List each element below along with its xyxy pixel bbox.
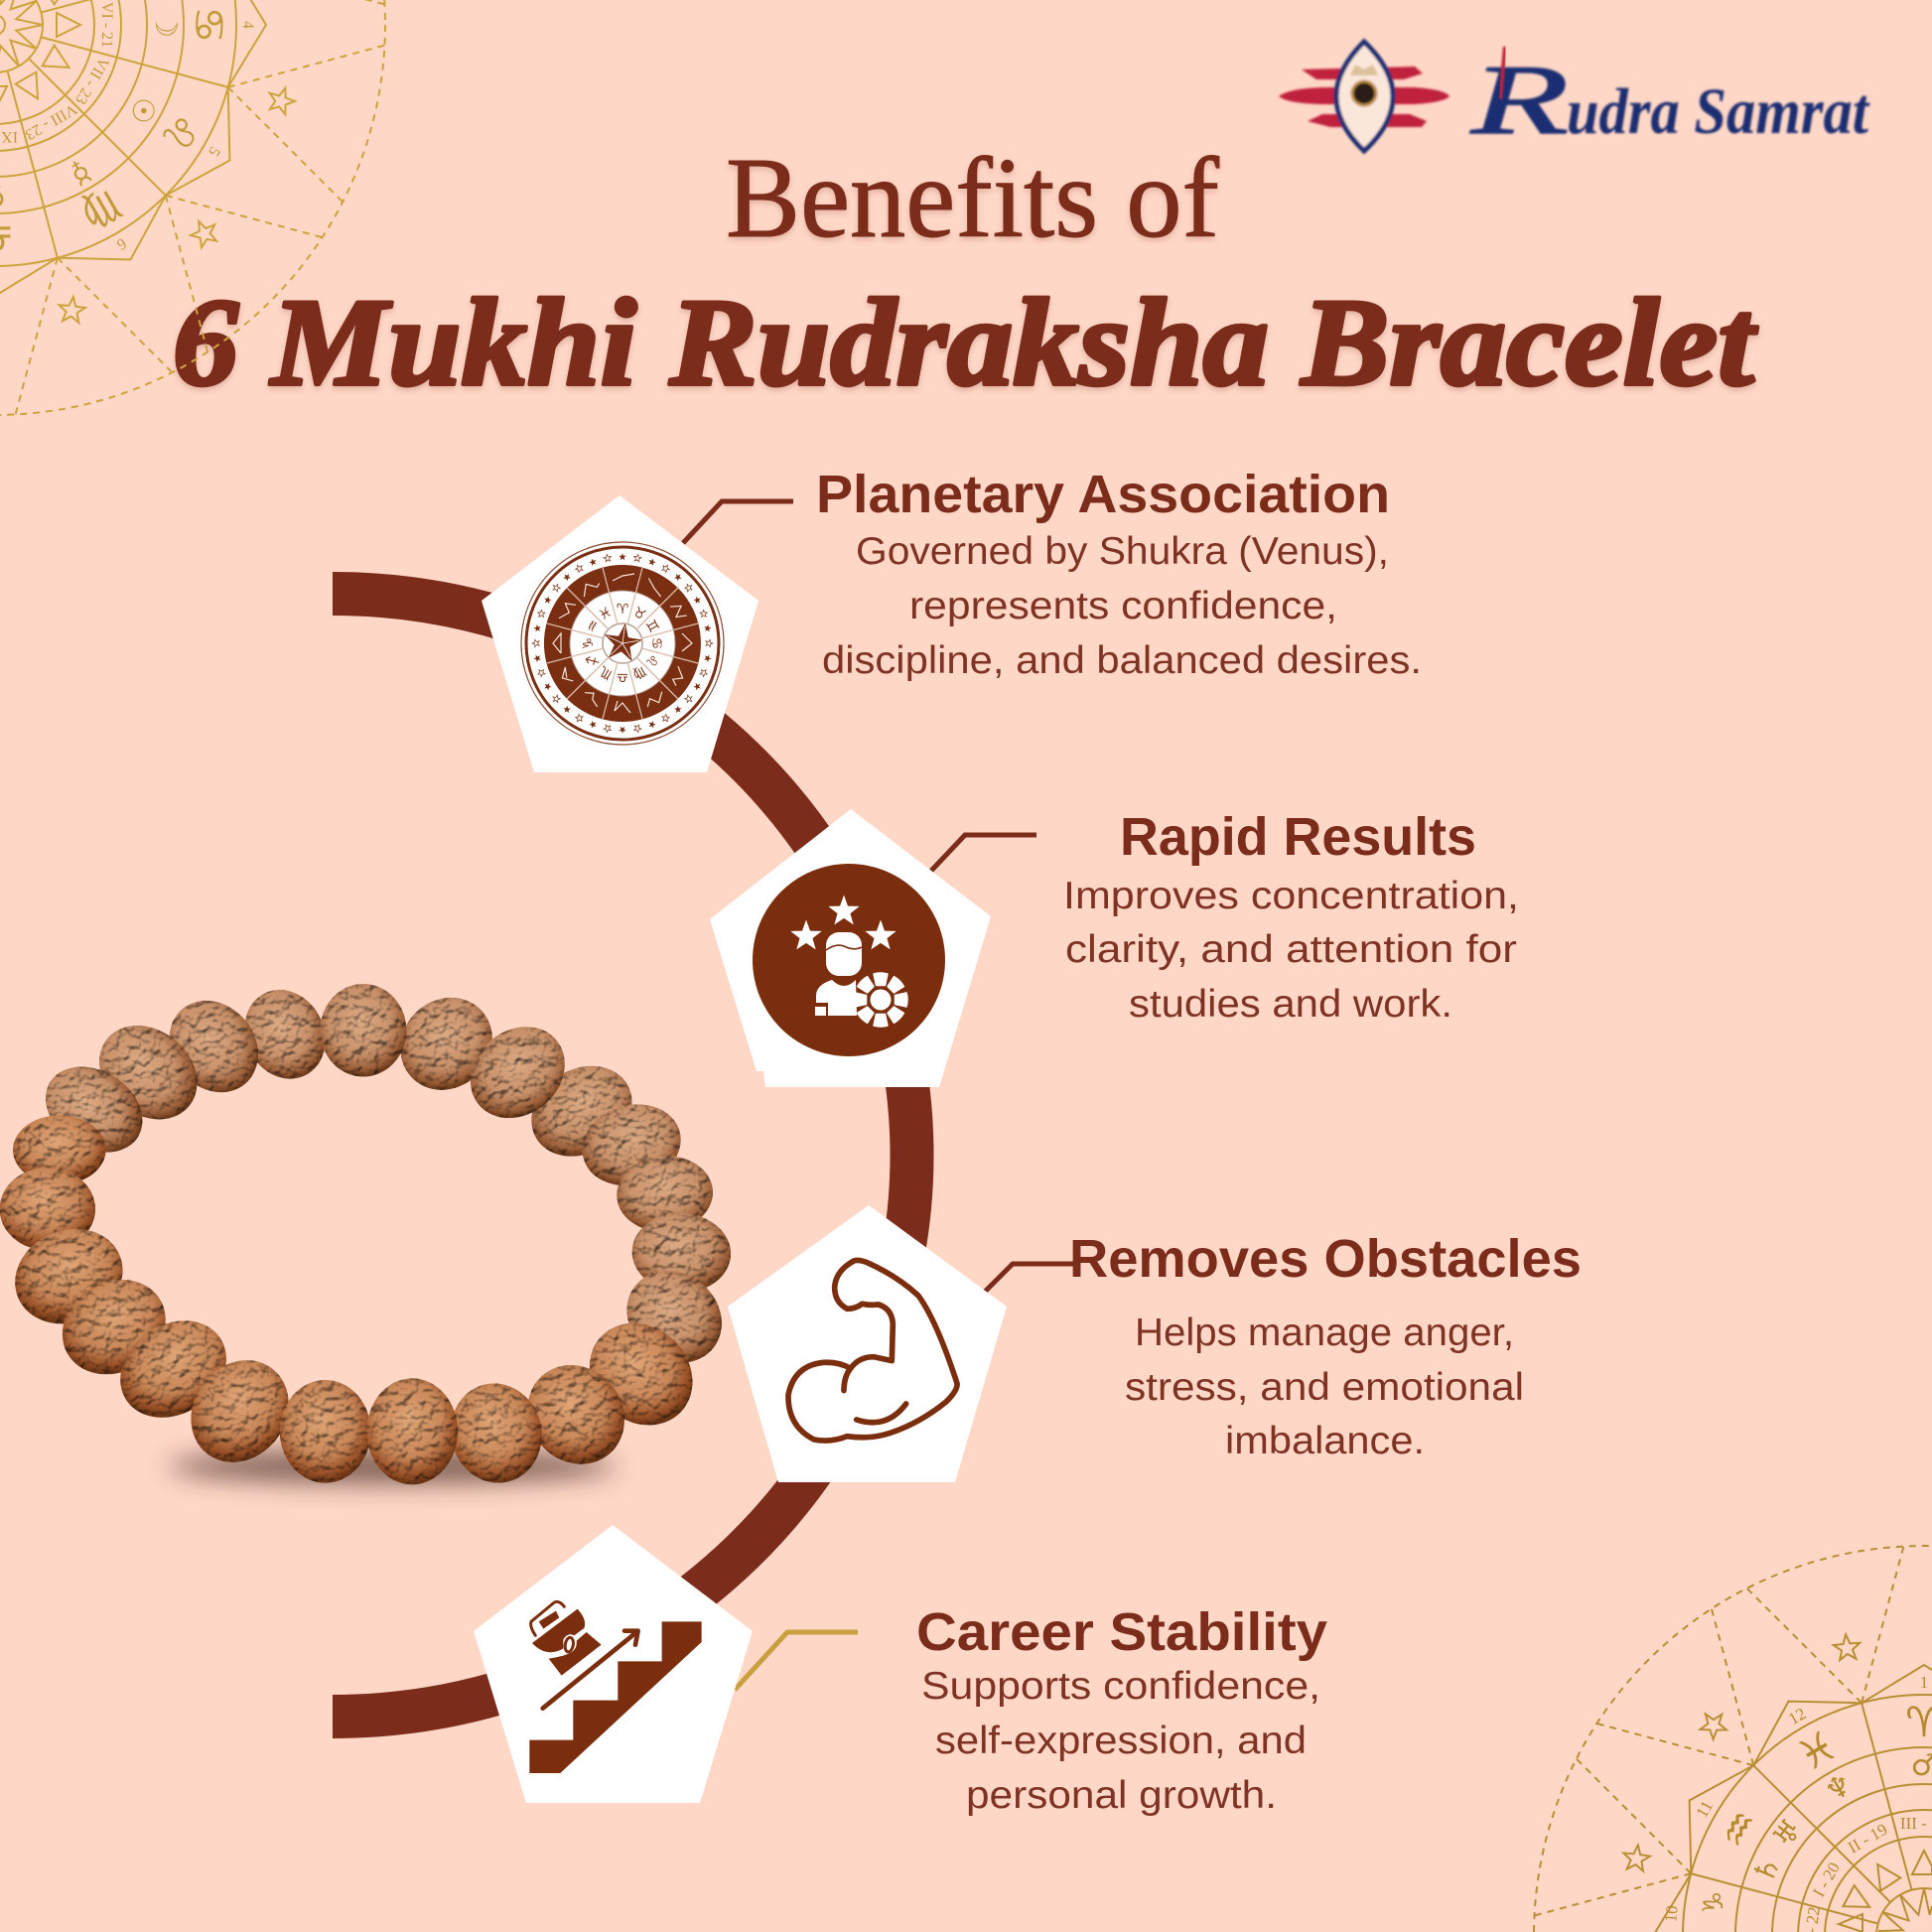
body: removes obstacles: stress, and emotional bbox=[1125, 1366, 1524, 1409]
icon: zodiac wheel: ♊ bbox=[641, 618, 662, 635]
zodiac ornament: top left: 4 bbox=[239, 21, 256, 29]
icon: briefcase on rising stairs bbox=[529, 1601, 702, 1773]
zodiac ornament: bottom right: ♓ bbox=[1789, 1721, 1846, 1781]
zodiac ornament: bottom right: ♆ bbox=[1819, 1767, 1860, 1810]
zodiac ornament: bottom right: ♄ bbox=[1746, 1851, 1788, 1888]
zodiac ornament: bottom right: 12 bbox=[1785, 1704, 1809, 1728]
zodiac ornament: top left bbox=[0, 0, 421, 451]
zodiac ornament: bottom right: 10 bbox=[1661, 1904, 1682, 1923]
icon: zodiac wheel: ♈ bbox=[617, 602, 629, 618]
pentagon node: planetary association bbox=[482, 495, 759, 772]
text block: removes obstacles bbox=[1069, 1229, 1582, 1462]
icon: zodiac wheel: ♐ bbox=[583, 651, 604, 669]
zodiac ornament: bottom right: 1 bbox=[1920, 1673, 1928, 1692]
pentagon node: rapid results bbox=[710, 809, 991, 1087]
icon: flexed arm bbox=[788, 1260, 957, 1441]
body: career stability: personal growth. bbox=[966, 1774, 1277, 1817]
logo: Rudra Samrat bbox=[1279, 42, 1869, 155]
body: rapid results bbox=[1063, 875, 1519, 1026]
leader line: rapid results bbox=[931, 835, 1036, 871]
body: rapid results: studies and work. bbox=[1129, 983, 1452, 1026]
bracelet photo bbox=[0, 984, 736, 1485]
logo wordmark: udra Samrat bbox=[1567, 75, 1869, 148]
bracelet shadow bbox=[169, 1449, 616, 1483]
rudraksha beads bbox=[0, 984, 736, 1485]
zodiac ornament: bottom right bbox=[1534, 1546, 1932, 1932]
zodiac ornament: top left: ♍ bbox=[73, 180, 130, 240]
pentagon node: removes obstacles bbox=[728, 1205, 1007, 1482]
zodiac ornament: top left: ♌ bbox=[150, 103, 210, 160]
icon: zodiac wheel: ♒ bbox=[583, 618, 604, 635]
leader line: removes obstacles bbox=[983, 1264, 1078, 1294]
heading: removes obstacles: Removes Obstacles bbox=[1069, 1229, 1582, 1289]
icon: zodiac wheel: ♍ bbox=[630, 662, 648, 683]
title bbox=[173, 135, 1758, 412]
text block: rapid results bbox=[1063, 807, 1519, 1026]
logo red trident line bbox=[1500, 47, 1505, 99]
logo wordmark bbox=[1469, 45, 1869, 155]
curved timeline arc bbox=[333, 594, 912, 1717]
body: career stability: Supports confidence, bbox=[921, 1665, 1320, 1708]
icon: zodiac wheel: ♑ bbox=[581, 637, 597, 649]
zodiac ornament: top left: ☽ bbox=[148, 12, 183, 38]
body: rapid results: clarity, and attention for bbox=[1065, 928, 1517, 971]
leader line: planetary association bbox=[683, 501, 793, 543]
body: career stability bbox=[921, 1665, 1320, 1817]
leader line: career stability bbox=[735, 1632, 858, 1690]
zodiac ornament: top left: ☉ bbox=[121, 89, 164, 130]
zodiac ornament: top left: ♋ bbox=[185, 6, 233, 44]
body: planetary association: represents confidence, bbox=[909, 585, 1337, 627]
zodiac ornament: top left: VII - 23 bbox=[71, 55, 112, 107]
zodiac ornament: bottom right: II - 19 bbox=[1845, 1820, 1890, 1858]
body: planetary association: Governed by Shukra (Venus), bbox=[856, 530, 1389, 573]
zodiac ornament: top left: 5 bbox=[205, 144, 223, 159]
heading: planetary association: Planetary Association bbox=[816, 465, 1390, 524]
text block: career stability bbox=[916, 1602, 1327, 1817]
body: planetary association: discipline, and balanced desires. bbox=[822, 639, 1422, 682]
zodiac ornament: top left: 6 bbox=[114, 234, 129, 253]
pentagon node: career stability bbox=[474, 1525, 753, 1803]
heading: rapid results: Rapid Results bbox=[1120, 807, 1476, 867]
body: removes obstacles: imbalance. bbox=[1225, 1420, 1425, 1462]
body: removes obstacles: Helps manage anger, bbox=[1135, 1311, 1514, 1354]
logo mark: eye with red stripes bbox=[1279, 42, 1449, 151]
icon: zodiac wheel: ♋ bbox=[648, 637, 664, 649]
zodiac ornament: bottom right: ♑ bbox=[1696, 1887, 1731, 1917]
title line 2: 6 Mukhi Rudraksha Bracelet bbox=[173, 274, 1758, 412]
zodiac ornament: top left: VI - 21 bbox=[98, 2, 115, 48]
zodiac ornament: bottom right: ♒ bbox=[1709, 1801, 1769, 1858]
title line 1: Benefits of bbox=[726, 135, 1219, 262]
body: rapid results: Improves concentration, bbox=[1063, 875, 1519, 917]
heading: career stability: Career Stability bbox=[916, 1602, 1327, 1662]
icon: zodiac wheel bbox=[521, 542, 724, 745]
zodiac ornament: bottom right: 11 bbox=[1692, 1797, 1717, 1821]
body: career stability: self-expression, and bbox=[935, 1720, 1307, 1762]
icon: zodiac wheel: ♏ bbox=[596, 662, 615, 683]
icon: zodiac wheel: ♎ bbox=[617, 669, 628, 685]
body: planetary association bbox=[822, 530, 1422, 682]
logo wordmark: R bbox=[1469, 45, 1569, 155]
zodiac ornament: bottom right: I - 20 bbox=[1809, 1860, 1844, 1900]
zodiac ornament: top left: VIII - 23 bbox=[22, 100, 79, 143]
text block: planetary association bbox=[816, 465, 1422, 682]
body: removes obstacles bbox=[1125, 1311, 1524, 1462]
icon: zodiac wheel: ♓ bbox=[597, 604, 615, 624]
zodiac ornament: top left: ☿ bbox=[64, 153, 96, 192]
icon: expert with stars and flower gear bbox=[753, 864, 945, 1056]
icon: zodiac wheel: ♌ bbox=[641, 651, 662, 669]
icon: zodiac wheel: ♉ bbox=[630, 604, 648, 624]
zodiac ornament: bottom right: ♅ bbox=[1766, 1813, 1810, 1855]
